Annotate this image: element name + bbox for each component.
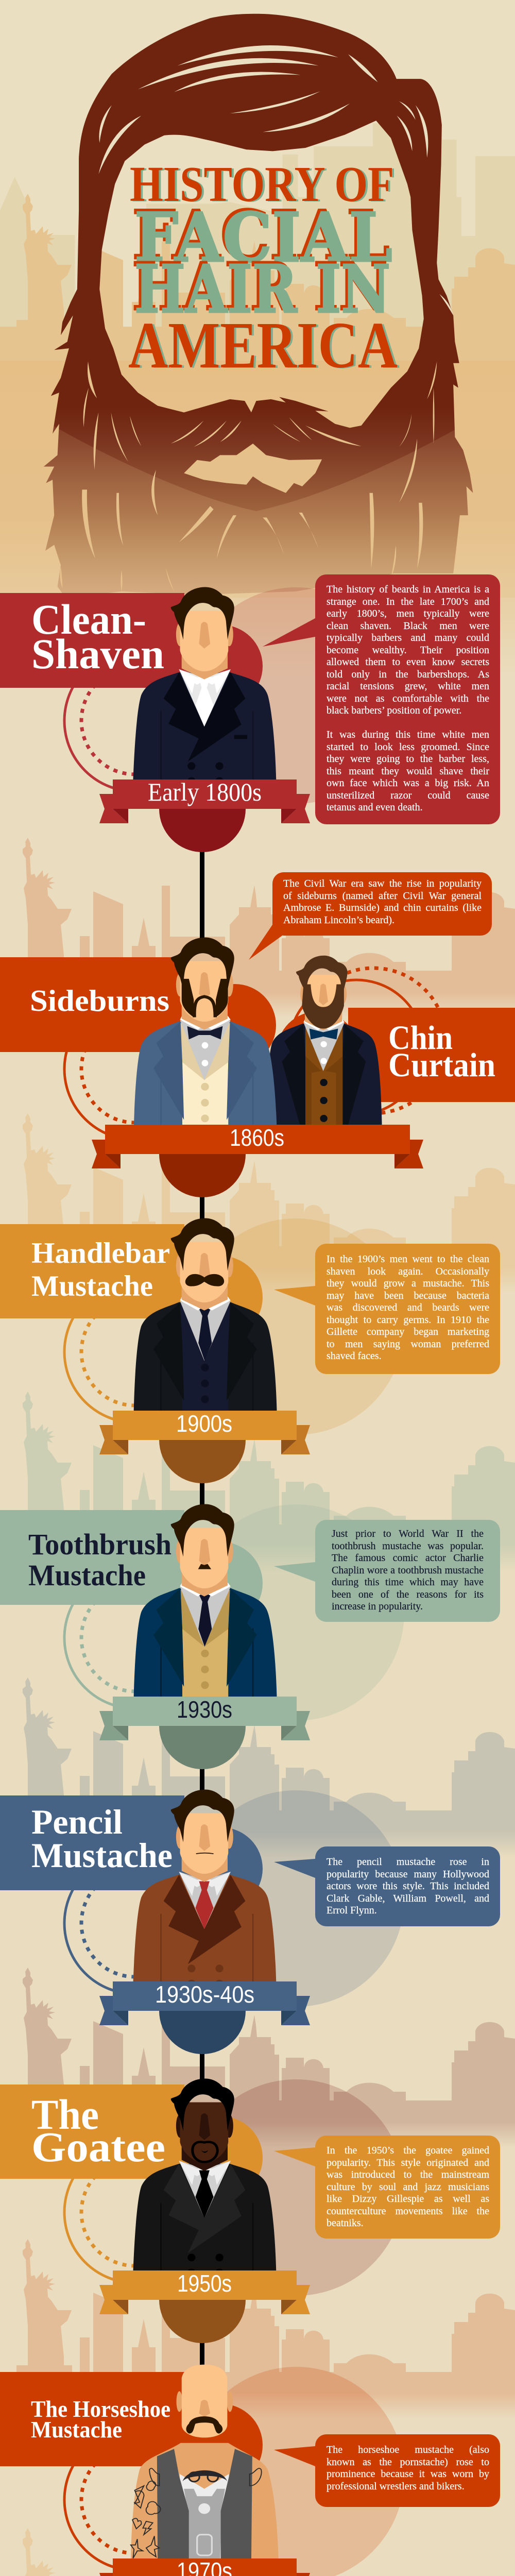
text box: goatee: counterculture movements like the	[327, 2205, 489, 2216]
text box: clean-shaven: allowed them to even know secrets	[327, 656, 489, 668]
header front skyline	[0, 194, 515, 374]
text box: goatee: like Dizzy Gillespie as well as	[327, 2193, 489, 2205]
text box: sideburns: Ambrose E. Burnside) and chin curtains (like	[283, 902, 482, 913]
name: sideburns: Sideburns	[30, 984, 169, 1018]
name	[28, 1528, 171, 1592]
text box: goatee: was introduced to the mainstream	[327, 2169, 489, 2180]
text box: toothbrush: Just prior to World War II the	[332, 1528, 484, 1539]
text box: toothbrush: been one of the reasons for its	[332, 1589, 484, 1600]
text box: goatee	[315, 2136, 500, 2239]
text box: clean-shaven: The history of beards in America is a	[327, 584, 489, 595]
figure: pencil mustache man	[133, 1790, 276, 1985]
text box: handlebar: was discovered and beards were	[327, 1302, 489, 1313]
date ribbon: Early 1800s	[148, 777, 262, 806]
vest	[157, 2449, 189, 2561]
skyline: pencil	[0, 1677, 515, 1858]
stem	[200, 1481, 204, 1510]
text box: clean-shaven: It was during this time white men	[327, 729, 489, 740]
arrow	[249, 925, 282, 960]
skyline: sideburns	[0, 838, 515, 1018]
text box: goatee: popularity. This style originated and	[327, 2157, 489, 2168]
figure: biker man	[131, 2365, 279, 2561]
section: clean-shaven	[0, 587, 315, 940]
big circle: pencil	[188, 1790, 404, 2007]
date ribbon	[99, 2270, 310, 2314]
text box: toothbrush: Chaplin wore a toothbrush mustache	[332, 1564, 484, 1575]
text box: goatee: beatniks.	[327, 2217, 364, 2229]
text box: clean-shaven: started to look less groomed. Since	[327, 741, 489, 752]
skyline: toothbrush	[0, 1392, 515, 1572]
name: Toothbrush	[28, 1528, 171, 1561]
date ribbon: 1950s	[177, 2270, 232, 2297]
text box: clean-shaven: clean shaven. Black men were	[327, 620, 489, 632]
hair and beard silhouette	[44, 14, 473, 598]
arrow	[274, 1286, 315, 1306]
bald head	[176, 2391, 182, 2412]
big circle: goatee	[188, 2079, 404, 2296]
date ribbon	[92, 1124, 423, 1168]
skyline: horseshoe	[0, 2239, 515, 2419]
semicircle	[159, 1154, 246, 1197]
text box: sideburns: Abraham Lincoln’s beard).	[283, 914, 394, 925]
section: sideburns and chin curtain	[0, 925, 515, 1221]
text box: pencil: actors wore this style. This included	[327, 1880, 489, 1892]
undershirt	[180, 2474, 229, 2561]
name: The Horseshoe	[31, 2396, 170, 2422]
text box: clean-shaven	[315, 574, 500, 824]
translucent hills over beard	[0, 394, 515, 598]
title line: History of: HISTORY OF	[132, 157, 396, 213]
banner	[0, 2372, 184, 2466]
chest tattoo	[183, 2470, 227, 2481]
date ribbon	[99, 1981, 310, 2025]
figure: toothbrush man	[134, 1504, 277, 1699]
text box: handlebar: may have been because bacteria	[327, 1290, 489, 1301]
name: Pencil	[31, 1802, 123, 1841]
text box: pencil	[315, 1846, 500, 1926]
name	[31, 1802, 173, 1875]
title line: Hair in: HAIR IN	[132, 248, 388, 325]
name: Mustache	[31, 1270, 153, 1302]
title line: Facial: FACIAL	[134, 198, 392, 277]
text box: clean-shaven: typically barbers and many could	[327, 632, 489, 643]
figure: goatee man	[133, 2079, 276, 2274]
text box: clean-shaven: were not as comfortable with the	[327, 692, 489, 704]
date ribbon: 1860s	[230, 1124, 284, 1151]
name: Handlebar	[31, 1237, 170, 1269]
name: Clean-	[31, 596, 146, 643]
stem	[200, 1767, 204, 1795]
text box: horseshoe: professional wrestlers and bikers.	[327, 2480, 465, 2492]
skyline: handlebar	[0, 1113, 515, 1294]
name: Goatee	[31, 2123, 165, 2171]
banner	[0, 1510, 184, 1605]
text box: horseshoe	[315, 2434, 500, 2507]
stem	[200, 850, 204, 940]
section: the horseshoe mustache	[0, 2365, 315, 2576]
date ribbon: 1900s	[176, 1410, 232, 1437]
text box: handlebar: to men saying woman preferred	[327, 1338, 489, 1350]
arrow	[274, 1562, 315, 1582]
text box: clean-shaven: told only in the barbershops. As	[327, 669, 489, 680]
text box: clean-shaven: racial tensions grew, white men	[327, 681, 489, 692]
text box: pencil: The pencil mustache rose in	[327, 1856, 489, 1868]
name: Shaven	[31, 630, 164, 677]
text box: clean-shaven: early 1800’s, men typically were	[327, 608, 489, 619]
text box: horseshoe: known as the pornstache) rose to	[327, 2456, 489, 2468]
name: The	[31, 2091, 99, 2138]
name	[31, 2396, 170, 2443]
text box: handlebar: thought to carry germs. In 1910 the	[327, 1314, 489, 1325]
text box: clean-shaven: they were going to the barber less,	[327, 753, 489, 765]
date ribbon: 1930s	[177, 1696, 232, 1723]
name: chin curtain: Chin	[388, 1019, 453, 1057]
big circle: clean-shaven	[188, 587, 404, 804]
text box: handlebar: In the 1900’s men went to the clean	[327, 1253, 489, 1265]
name: chin curtain	[388, 1019, 495, 1084]
big circle: handlebar	[188, 1218, 404, 1435]
name	[31, 596, 164, 677]
text box: pencil: Errol Flynn.	[327, 1905, 377, 1916]
big circle: toothbrush	[188, 1504, 404, 1721]
date ribbon	[99, 777, 310, 823]
background skylines and big circles	[0, 838, 515, 2576]
text box: clean-shaven: strange one. In the late 1700’s and	[327, 596, 489, 607]
text box: toothbrush: toothbrush mustache was popular.	[332, 1540, 484, 1552]
text box: clean-shaven: tetanus and even death.	[327, 802, 423, 813]
section: handlebar mustache	[0, 1218, 315, 1510]
text box: goatee: In the 1950’s the goatee gained	[327, 2145, 489, 2156]
text box: handlebar: Gillette company began marketing	[327, 1326, 489, 1337]
semicircle	[159, 1440, 246, 1483]
figure: sideburns man	[134, 938, 277, 1132]
banner: sideburns	[0, 957, 184, 1052]
title line: History of: HISTORY OF	[130, 157, 394, 212]
big circle: horseshoe	[188, 2367, 404, 2576]
text box: toothbrush: during this time which may have	[332, 1577, 484, 1588]
name	[31, 1237, 170, 1302]
banner	[0, 1224, 184, 1318]
beard highlights	[60, 362, 437, 591]
banner	[0, 1795, 184, 1890]
text box: clean-shaven: this meant they would shave their	[327, 766, 489, 777]
figure: clean-shaven man	[133, 587, 276, 783]
name: Mustache	[31, 2416, 122, 2443]
text box: clean-shaven: black barbers’ position of power.	[327, 705, 461, 716]
date ribbon	[99, 2557, 310, 2576]
skyline: goatee	[0, 1968, 515, 2148]
arrow	[274, 1859, 315, 1878]
arrow	[274, 2147, 315, 2166]
banner: chin curtain	[348, 1008, 515, 1102]
name: Mustache	[28, 1558, 146, 1592]
text box: pencil: popularity because many Hollywood	[327, 1868, 489, 1879]
text box: clean-shaven: unsterilized razor could cause	[327, 789, 489, 801]
text box: toothbrush: The famous comic actor Charlie	[332, 1552, 484, 1564]
text box: horseshoe: prominence because it was worn by	[327, 2468, 489, 2480]
name	[31, 2091, 165, 2171]
title	[128, 157, 400, 382]
text box: handlebar	[315, 1244, 500, 1374]
date ribbon	[99, 1696, 310, 1740]
text box: toothbrush	[315, 1520, 500, 1622]
semicircle	[159, 1726, 246, 1769]
section: toothbrush mustache	[0, 1504, 315, 1795]
arrow	[263, 618, 315, 647]
semicircle	[159, 2011, 246, 2054]
text box: handlebar: shaved faces.	[327, 1350, 382, 1362]
title line: Hair in: HAIR IN	[134, 251, 390, 328]
text box: handlebar: they would grow a mustache. This	[327, 1278, 489, 1289]
text box: clean-shaven: own face which was a big risk. An	[327, 777, 489, 789]
text box: sideburns	[272, 872, 492, 936]
banner	[0, 2084, 184, 2179]
header ground	[0, 361, 515, 680]
text box: handlebar: shaven look again. Occasionally	[327, 1265, 489, 1277]
date ribbon: 1930s-40s	[155, 1981, 254, 2008]
semicircle	[159, 808, 246, 852]
hair highlights	[98, 45, 453, 315]
title line: Facial: FACIAL	[132, 195, 390, 275]
arrow	[274, 2446, 315, 2466]
text box: goatee: culture by soul and jazz musicians	[327, 2181, 489, 2193]
title line: America: AMERICA	[130, 309, 400, 382]
section: pencil mustache	[0, 1790, 315, 2081]
date ribbon	[99, 1410, 310, 1454]
figure: chin curtain man	[266, 956, 382, 1130]
section: the goatee	[0, 2079, 315, 2370]
text box: clean-shaven: become wealthy. Their position	[327, 644, 489, 655]
stem	[200, 2053, 204, 2081]
header back skyline	[0, 123, 515, 365]
skyline: chevron	[23, 2528, 55, 2576]
name: Mustache	[31, 1836, 173, 1875]
figure: handlebar man	[134, 1218, 277, 1413]
text box: pencil: Clark Gable, William Powell, and	[327, 1893, 489, 1904]
text box: sideburns: of sideburns (named after Civil War general	[283, 890, 482, 902]
stem	[200, 1195, 204, 1221]
name: chin curtain: Curtain	[388, 1046, 495, 1084]
text box: sideburns: The Civil War era saw the rise in popularity	[283, 878, 482, 889]
semicircle	[159, 2300, 246, 2343]
page background header sky	[0, 0, 515, 392]
arm tattoos	[131, 2468, 262, 2558]
title line: America: AMERICA	[128, 309, 398, 382]
text box: toothbrush: increase in popularity.	[332, 1601, 423, 1612]
banner	[0, 593, 184, 688]
stem	[200, 2342, 204, 2370]
text box: horseshoe: The horseshoe mustache (also	[327, 2444, 489, 2455]
